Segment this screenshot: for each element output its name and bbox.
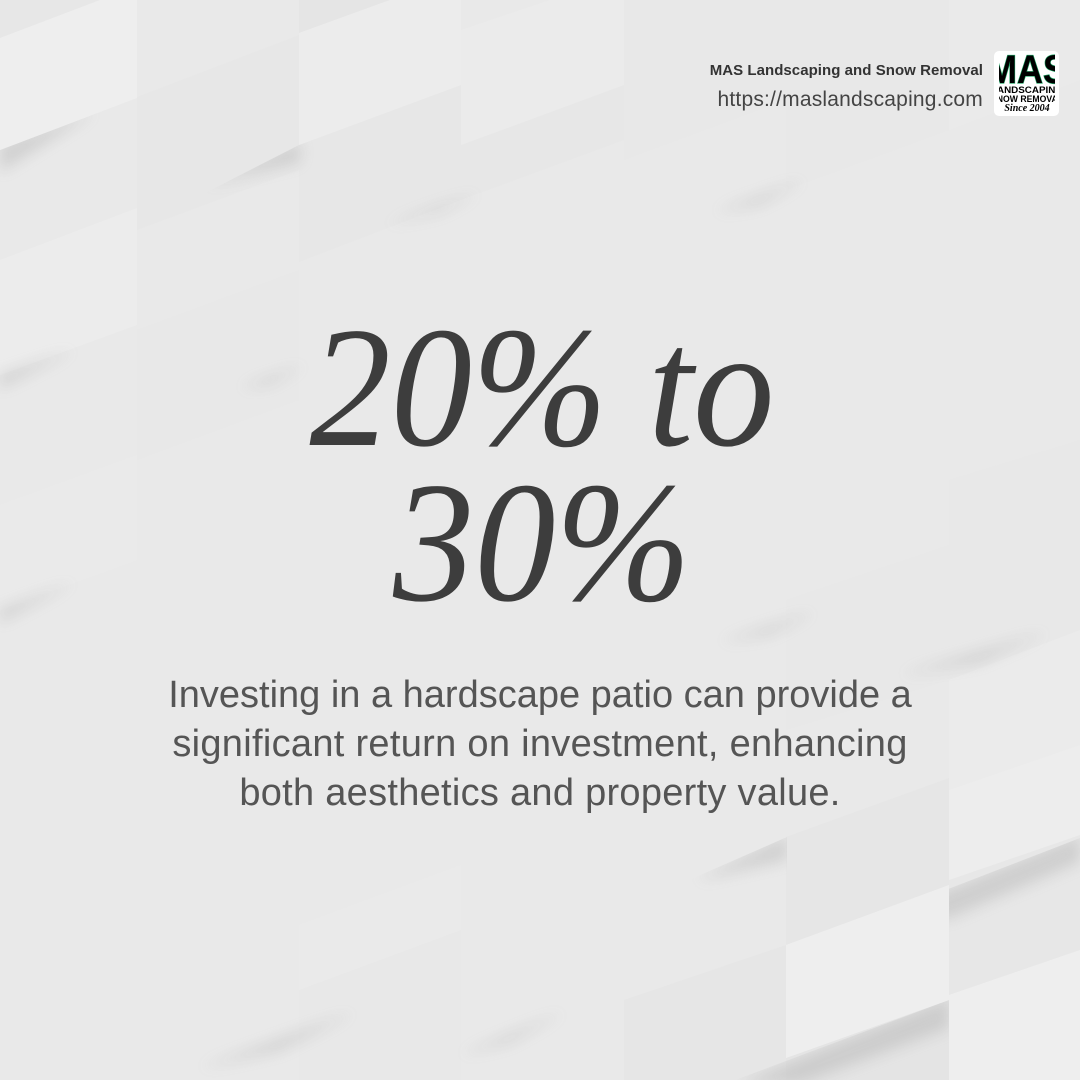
description text xyxy=(168,674,912,814)
logo: Since 2004 xyxy=(1004,103,1050,114)
header: website url: https://maslandscaping.com xyxy=(718,88,983,111)
header: company name: MAS Landscaping and Snow Removal xyxy=(710,62,983,79)
description text: Investing in a hardscape patio can provide a xyxy=(168,674,912,716)
main statistic: 20% to xyxy=(309,293,774,483)
main statistic xyxy=(309,293,774,638)
logo xyxy=(994,51,1059,116)
main statistic: 30% xyxy=(393,448,691,638)
description text: significant return on investment, enhancing xyxy=(172,723,908,765)
description text: both aesthetics and property value. xyxy=(239,772,841,814)
